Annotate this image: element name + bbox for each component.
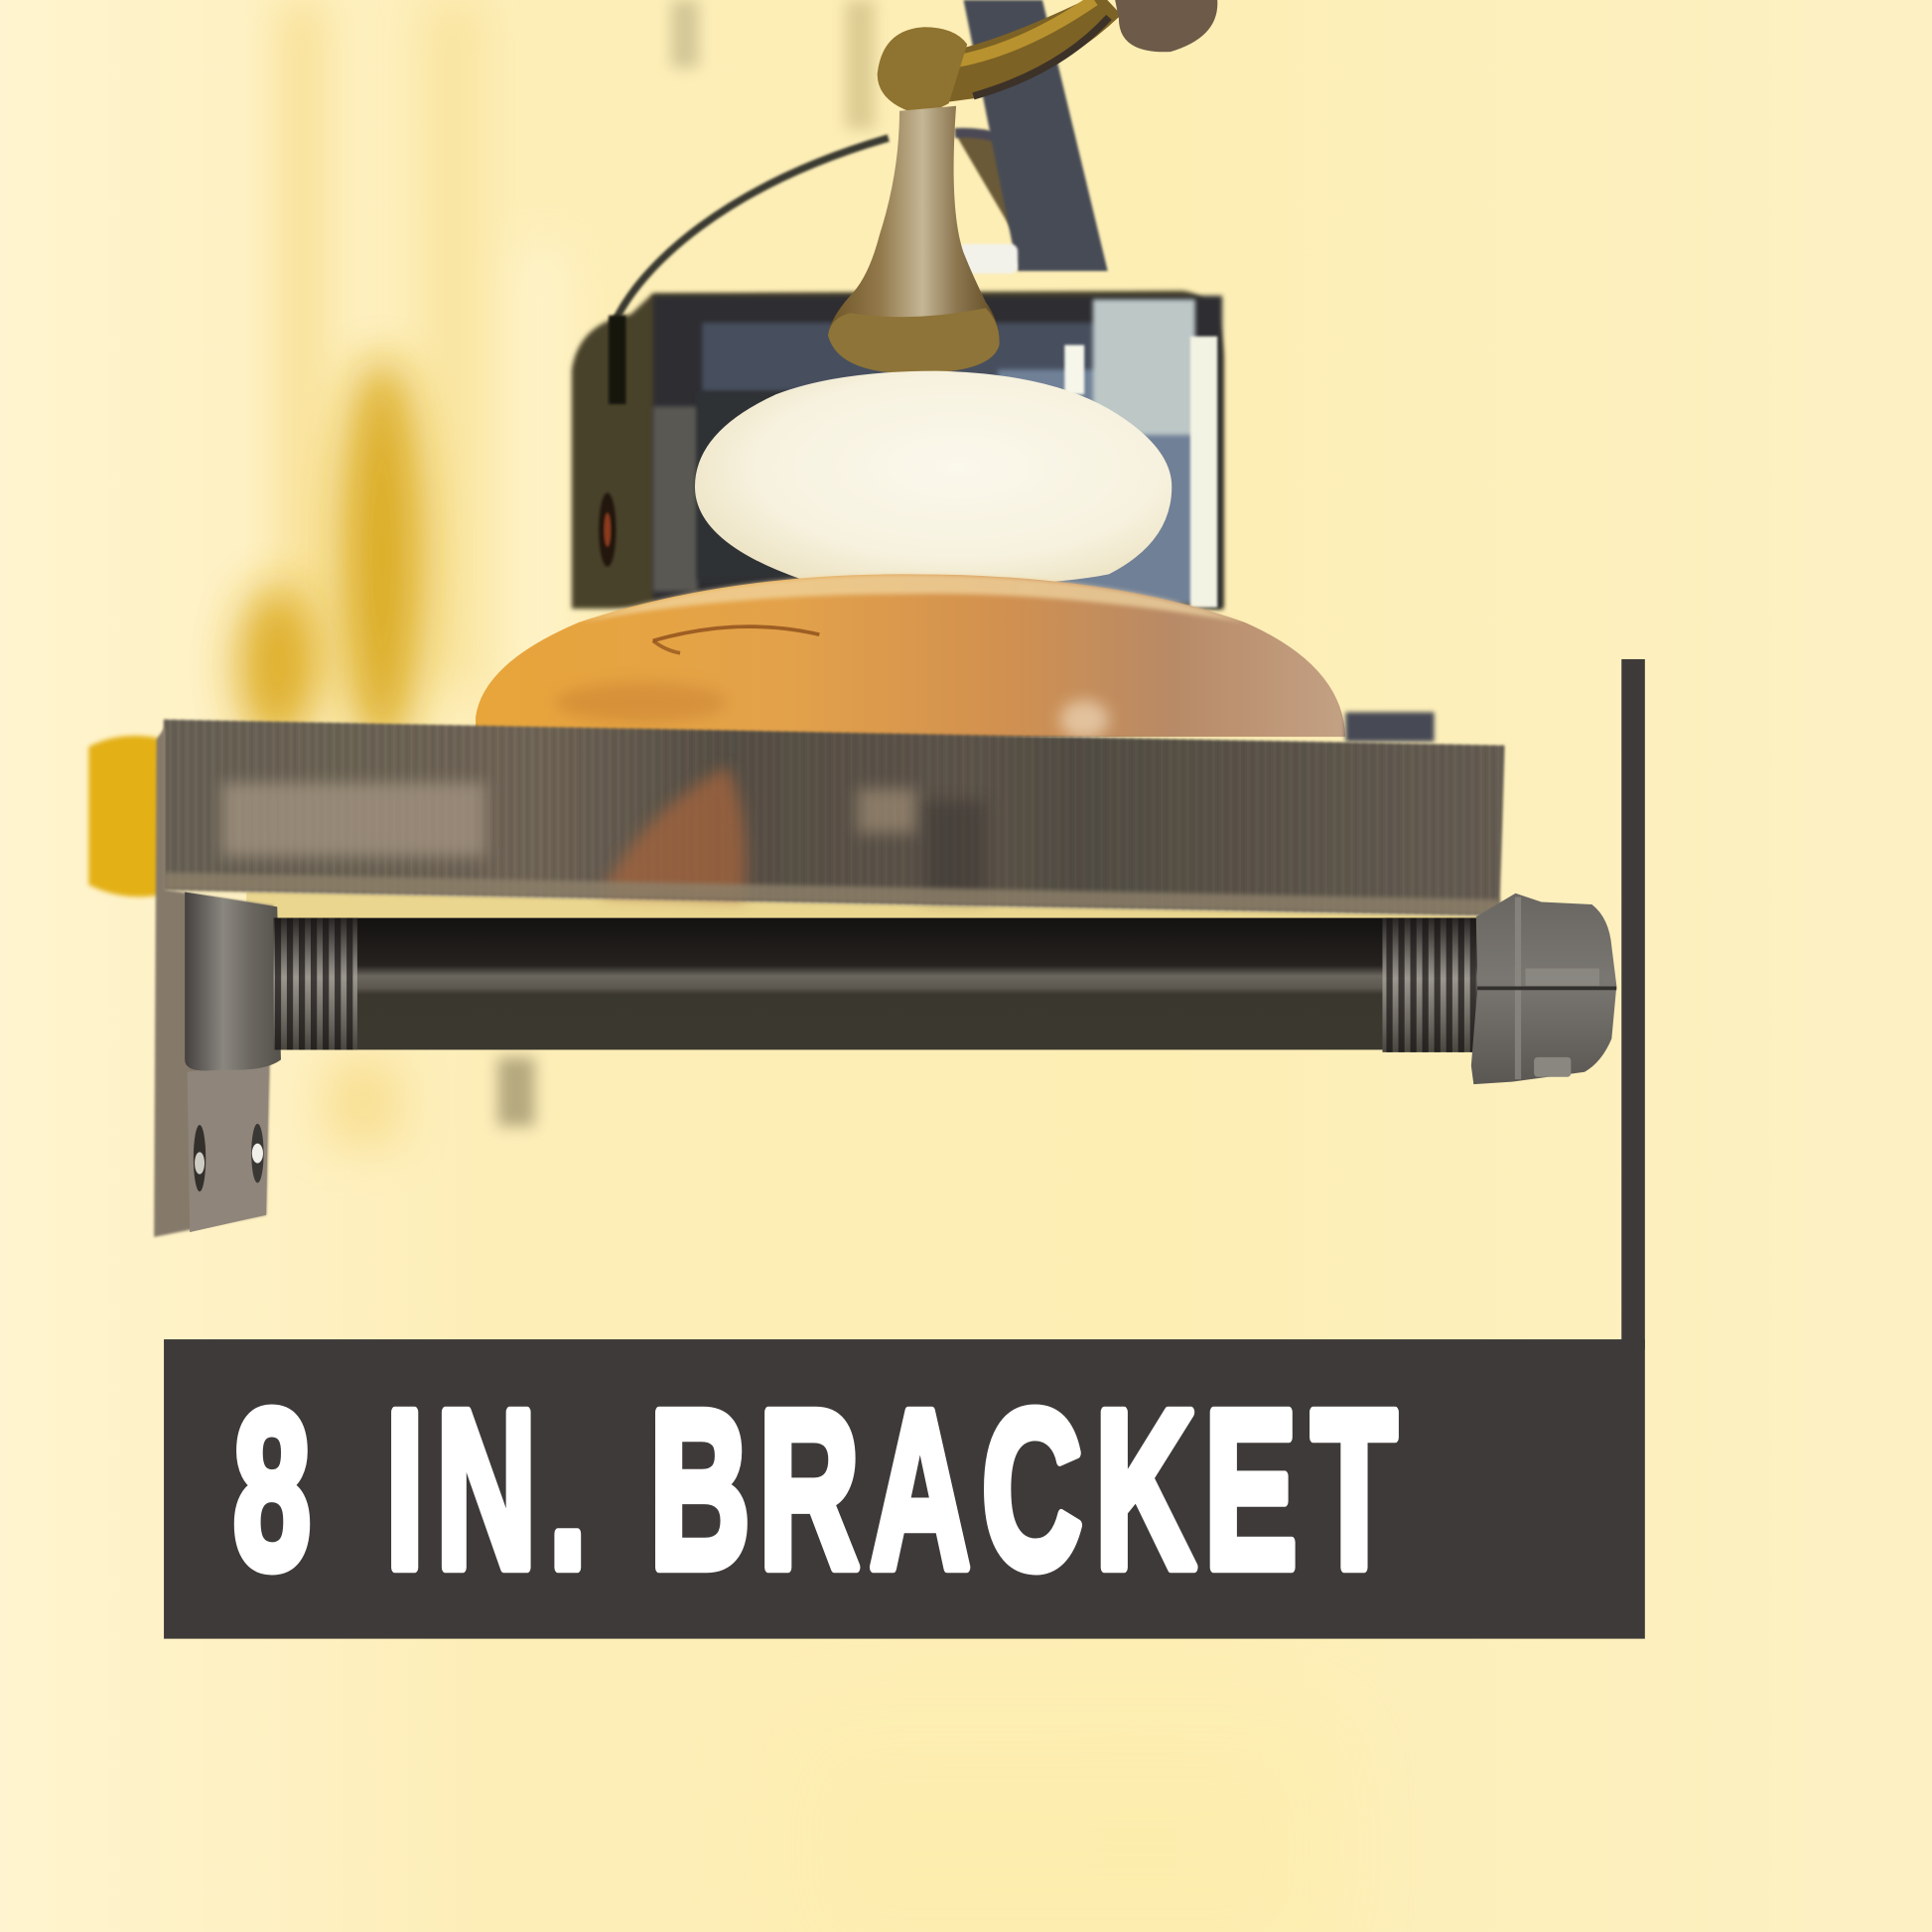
wooden dome [476, 574, 1345, 740]
mounting bracket flange [154, 727, 281, 1237]
wood shelf plank [164, 720, 1504, 915]
small slate block behind shelf [1345, 712, 1435, 742]
iron pipe [274, 918, 1481, 1052]
pipe end cap [1471, 894, 1616, 1084]
brass hook [828, 0, 1217, 373]
yellow gap below plank [246, 893, 1491, 924]
label text: 8 IN. BRACKET [233, 1364, 1397, 1616]
white stone [695, 371, 1172, 585]
background objects: camera and strap [572, 0, 1223, 609]
label bar [164, 1339, 1645, 1639]
wall shadow left of shelf [88, 736, 163, 897]
vertical leader line [1621, 659, 1645, 1349]
callout label with leader line [164, 659, 1645, 1639]
